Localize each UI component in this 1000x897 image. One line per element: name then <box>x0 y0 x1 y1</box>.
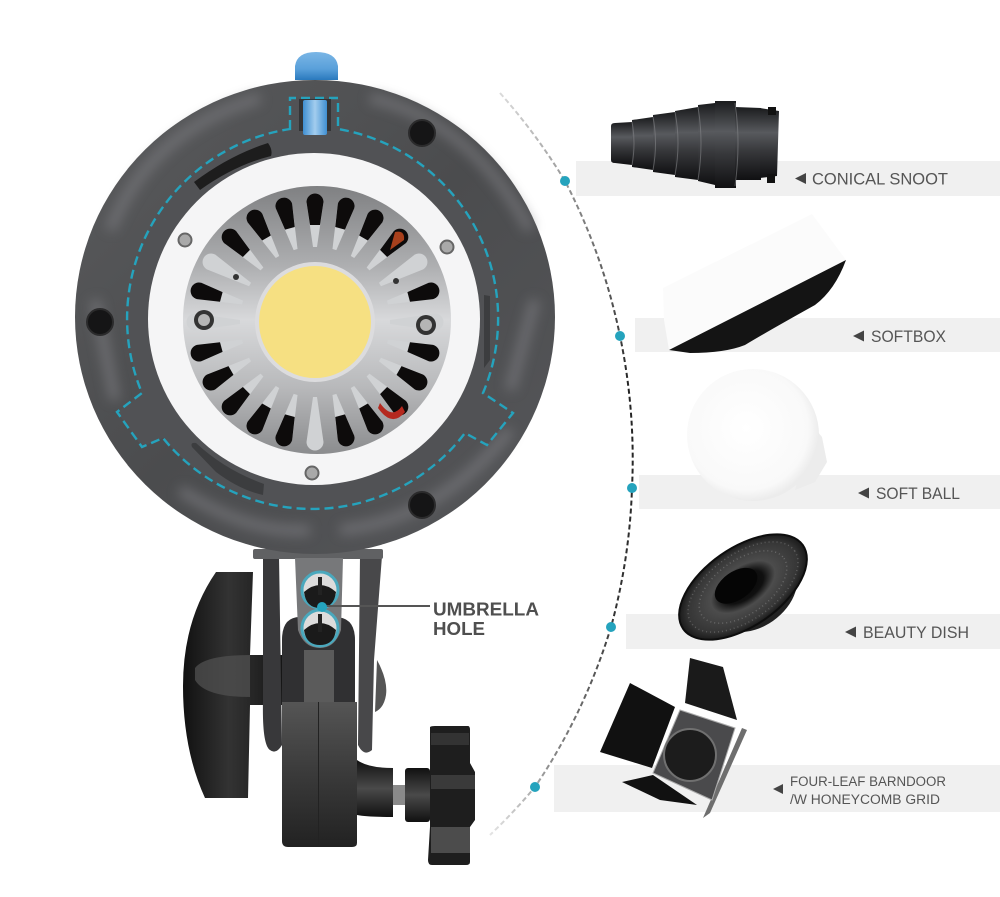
connector dots <box>530 176 637 792</box>
white ring <box>148 153 480 485</box>
large locking knob <box>183 572 285 798</box>
umbrella hole callout: UMBRELLA <box>433 598 539 620</box>
accessory: soft ball <box>639 369 1000 509</box>
cooling vents <box>186 194 444 450</box>
label band <box>635 318 1000 352</box>
accessory: four-leaf barndoor <box>554 658 1000 818</box>
panel: light head <box>75 52 555 554</box>
side screw and star knob <box>357 726 475 865</box>
bottom door <box>622 775 697 805</box>
softbox white shell <box>663 214 846 350</box>
vent interior details <box>194 232 436 419</box>
silver ring screws <box>178 234 454 480</box>
pivot highlight <box>304 650 334 702</box>
body highlights <box>95 98 535 530</box>
accessory: soft ball: SOFT BALL <box>876 485 960 503</box>
label <box>858 488 869 498</box>
right pivot bolt <box>375 660 386 712</box>
upper slot <box>194 143 272 190</box>
accessory: softbox: SOFTBOX <box>871 328 946 346</box>
accessory: beauty dish: BEAUTY DISH <box>863 624 969 642</box>
panel: mounting bracket and clamp <box>183 549 475 865</box>
black body screws <box>87 120 435 518</box>
right door <box>703 728 747 818</box>
top door <box>685 658 737 720</box>
honeycomb grid <box>664 729 716 781</box>
LED chip <box>257 264 373 380</box>
umbrella hole callout <box>317 598 539 639</box>
diffuser ball <box>687 369 819 501</box>
label band <box>554 765 1000 812</box>
head body <box>75 80 555 554</box>
label <box>773 784 783 794</box>
right bracket arm <box>358 556 382 753</box>
left door <box>600 683 675 768</box>
snoot seams <box>632 103 738 186</box>
lower slot <box>192 443 264 495</box>
label <box>845 626 856 638</box>
frame <box>653 710 735 800</box>
label band <box>626 614 1000 649</box>
ball neck <box>795 425 827 490</box>
clamp block <box>282 702 357 847</box>
accessory: four-leaf barndoor: /W HONEYCOMB GRID <box>790 792 940 807</box>
teal stitching outline <box>117 98 513 509</box>
softbox black interior <box>669 260 846 353</box>
left bracket arm <box>263 556 282 752</box>
silver heat sink <box>183 186 451 454</box>
accessory: conical snoot: CONICAL SNOOT <box>812 170 948 188</box>
accessory: beauty dish <box>626 513 1000 666</box>
inner plate <box>117 98 513 509</box>
snoot <box>611 101 779 188</box>
accessory: softbox <box>635 214 1000 353</box>
label band <box>576 161 1000 196</box>
label band <box>639 475 1000 509</box>
label <box>795 173 806 184</box>
accessory: four-leaf barndoor: FOUR-LEAF BARNDOOR <box>790 774 946 789</box>
dashed connector arc <box>490 93 633 835</box>
umbrella hole callout: HOLE <box>433 618 485 639</box>
top mounting plate <box>253 549 383 559</box>
accessory: conical snoot <box>576 101 1000 196</box>
right slot <box>484 295 490 368</box>
dish <box>661 513 829 666</box>
label <box>853 330 864 342</box>
umbrella hole plate <box>295 558 343 648</box>
pivot body <box>282 617 355 702</box>
blue release button <box>295 52 338 80</box>
blue slider tab <box>299 99 331 135</box>
